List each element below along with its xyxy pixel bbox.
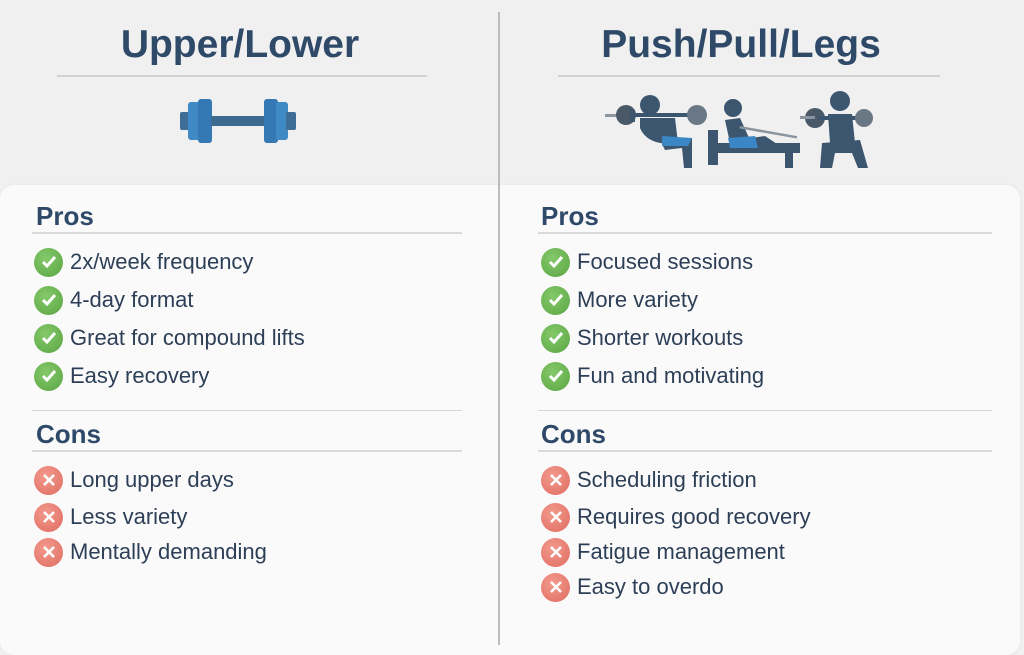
cons list: Fatigue management bbox=[577, 539, 785, 564]
pros list: Great for compound lifts bbox=[70, 325, 305, 350]
pros list: Easy recovery bbox=[70, 363, 209, 388]
heading: Pros: Pros bbox=[541, 201, 599, 231]
heading: Cons: Cons bbox=[541, 419, 606, 449]
icon: dumbbell bbox=[180, 99, 296, 143]
pros list bbox=[34, 248, 305, 391]
heading: Cons: Cons bbox=[36, 419, 101, 449]
cons list: Long upper days bbox=[70, 467, 234, 492]
pros list bbox=[541, 248, 764, 391]
panel: Upper/Lower pros and cons bbox=[32, 201, 462, 567]
cons list: Mentally demanding bbox=[70, 539, 267, 564]
pros list: Fun and motivating bbox=[577, 363, 764, 388]
pros list: 2x/week frequency bbox=[70, 249, 253, 274]
pros list: More variety bbox=[577, 287, 698, 312]
cons list bbox=[34, 466, 267, 567]
pros list: Focused sessions bbox=[577, 249, 753, 274]
cons list: Requires good recovery bbox=[577, 504, 811, 529]
cons list: Easy to overdo bbox=[577, 574, 724, 599]
cons list: Scheduling friction bbox=[577, 467, 757, 492]
heading: Pros: Pros bbox=[36, 201, 94, 231]
icon: exercise figures bbox=[605, 91, 873, 168]
title: Upper/Lower: Upper/Lower bbox=[121, 23, 359, 66]
cons list: Less variety bbox=[70, 504, 187, 529]
title: Push/Pull/Legs: Push/Pull/Legs bbox=[601, 23, 881, 66]
pros list: Shorter workouts bbox=[577, 325, 743, 350]
cons list bbox=[541, 466, 811, 602]
pros list: 4-day format bbox=[70, 287, 194, 312]
panel: Push/Pull/Legs pros and cons bbox=[538, 201, 992, 602]
